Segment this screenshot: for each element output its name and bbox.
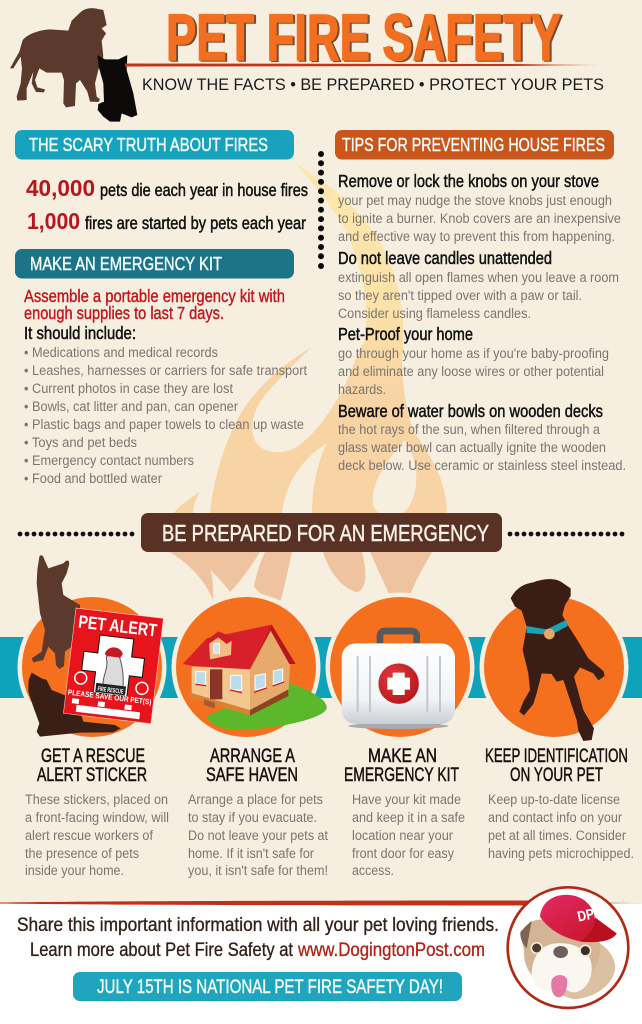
callout: national pet fire safety day (73, 972, 462, 1001)
step text: the presence of pets (25, 846, 139, 862)
tip: stove knobs: and effective way to prevent this from happening. (338, 229, 615, 245)
footer text: Share this important information with all your pet loving friends. (17, 914, 499, 936)
step text: Do not leave your pets at (188, 828, 328, 844)
title underline (125, 64, 602, 66)
step text: you, it isn't safe for them! (188, 863, 328, 879)
tip: water bowls (338, 401, 626, 474)
tip: candles: Consider using flameless candles. (338, 306, 531, 322)
step text (352, 792, 465, 879)
tip: candles: so they aren't tipped over with a paw or tail. (338, 288, 582, 304)
step: safe haven (188, 745, 328, 879)
checklist: • Toys and pet beds (24, 435, 137, 451)
checklist: • Leashes, harnesses or carriers for safe transport (24, 363, 307, 379)
panel: emergency kit list: MAKE AN EMERGENCY KIT (30, 253, 222, 274)
stat: 1,000: fires are started by pets each year (85, 213, 306, 233)
heading bar (15, 249, 294, 278)
icon: pet alert sticker: FIRE RESCUE (97, 686, 124, 696)
heading bar (335, 130, 614, 160)
checklist: • Food and bottled water (24, 471, 162, 487)
step: rescue alert sticker (25, 745, 169, 879)
footer text: www.DogingtonPost.com (297, 939, 485, 961)
footer text (17, 914, 499, 961)
tip: water bowls: the hot rays of the sun, when filtered through a (338, 422, 600, 438)
tip: pet-proof: hazards. (338, 382, 386, 398)
tip: pet-proof (338, 324, 609, 398)
step heading: SAFE HAVEN (206, 764, 298, 786)
icon: first aid kit (342, 631, 455, 729)
icon: shepherd dog and cat (28, 555, 121, 737)
checklist: • Plastic bags and paper towels to clean up waste (24, 417, 304, 433)
stat: 40,000: 40,000 (26, 175, 95, 201)
step text: a front-facing window, will (25, 810, 169, 826)
intro text (24, 286, 285, 343)
checklist: • Current photos in case they are lost (24, 381, 233, 397)
shepherd dog (32, 555, 80, 669)
step heading: GET A RESCUE (41, 745, 145, 767)
tip: pet-proof: go through your home as if you're baby-proofing (338, 346, 609, 362)
panel: scary truth (15, 130, 308, 234)
teal band (0, 637, 642, 698)
footer rule (0, 900, 642, 906)
tip: candles (338, 248, 619, 322)
step heading (206, 745, 298, 786)
step text (188, 792, 328, 879)
step text (25, 792, 169, 879)
step text: alert rescue workers of (25, 828, 153, 844)
icon: pet alert sticker: PLEASE SAVE OUR PET(S) (67, 688, 152, 707)
step text: and keep it in a safe (352, 810, 465, 826)
step heading (485, 745, 628, 786)
icon: black cat (97, 55, 137, 122)
tip: stove knobs: your pet may nudge the stove knobs just enough (338, 193, 612, 209)
stat: 40,000: pets die each year in house fires (100, 180, 308, 200)
panel: scary truth: THE SCARY TRUTH ABOUT FIRES (29, 134, 268, 155)
checklist: • Medications and medical records (24, 345, 218, 361)
step text: Have your kit made (352, 792, 461, 808)
panel: tips (335, 130, 626, 474)
tip: pet-proof: and eliminate any loose wires or other potential (338, 364, 604, 380)
tip: water bowls: glass water bowl can actually ignite the wooden (338, 440, 606, 456)
tip: stove knobs: Remove or lock the knobs on your stove (338, 171, 599, 191)
panel: step circles (18, 592, 628, 742)
step heading: ON YOUR PET (510, 764, 603, 786)
step text: Arrange a place for pets (188, 792, 323, 808)
heading: be prepared (141, 513, 502, 552)
step heading (344, 745, 459, 786)
stat: 1,000: 1,000 (27, 208, 80, 234)
icon: pet alert sticker: PET ALERT (77, 611, 158, 641)
step text: access. (352, 863, 394, 879)
dark cat (28, 673, 121, 737)
step text: pet at all times. Consider (488, 828, 626, 844)
stat: 40,000 (26, 175, 308, 201)
step text: inside your home. (25, 863, 124, 879)
step heading: ALERT STICKER (37, 764, 147, 786)
icon: bulldog badge (508, 887, 628, 1008)
callout: national pet fire safety day: JULY 15TH IS NATIONAL PET FIRE SAFETY DAY! (97, 976, 443, 998)
intro text: It should include: (24, 323, 136, 343)
checklist (24, 345, 307, 487)
icon: brown dog (10, 8, 107, 107)
tip: pet-proof: Pet-Proof your home (338, 324, 473, 344)
intro text: enough supplies to last 7 days. (24, 303, 224, 323)
step text: and contact info on your (488, 810, 622, 826)
stat: 1,000 (27, 208, 306, 234)
tip: candles: Do not leave candles unattended (338, 248, 552, 268)
icon: bulldog badge: DP (576, 906, 596, 926)
step: emergency kit (344, 745, 465, 879)
step text: home. If it isn't safe for (188, 846, 314, 862)
step: identification (485, 745, 634, 862)
footer text: Learn more about Pet Fire Safety at (30, 939, 293, 961)
step heading: ARRANGE A (210, 745, 295, 767)
step text: These stickers, placed on (25, 792, 168, 808)
icon: dog with collar (511, 579, 605, 741)
step heading: EMERGENCY KIT (344, 764, 459, 786)
step text (488, 792, 634, 862)
heading bar (15, 130, 294, 160)
checklist: • Emergency contact numbers (24, 453, 194, 469)
step text: front door for easy (352, 846, 455, 862)
header: dog and cat silhouettes (10, 8, 137, 122)
step heading: MAKE AN (368, 745, 437, 767)
intro text: Assemble a portable emergency kit with (24, 286, 285, 306)
icon: house (183, 625, 327, 730)
step heading (37, 745, 147, 786)
step text: Keep up-to-date license (488, 792, 620, 808)
subtitle: KNOW THE FACTS • BE PREPARED • PROTECT YOUR PETS (142, 76, 604, 94)
step text: to stay if you evacuate. (188, 810, 317, 826)
heading: be prepared: BE PREPARED FOR AN EMERGENCY (162, 520, 489, 546)
flame background (170, 164, 447, 602)
tip: stove knobs (338, 171, 621, 245)
step text: location near your (352, 828, 453, 844)
panel: emergency kit list (15, 249, 307, 487)
icon: pet alert sticker (63, 608, 163, 724)
checklist: • Bowls, cat litter and pan, can opener (24, 399, 238, 415)
